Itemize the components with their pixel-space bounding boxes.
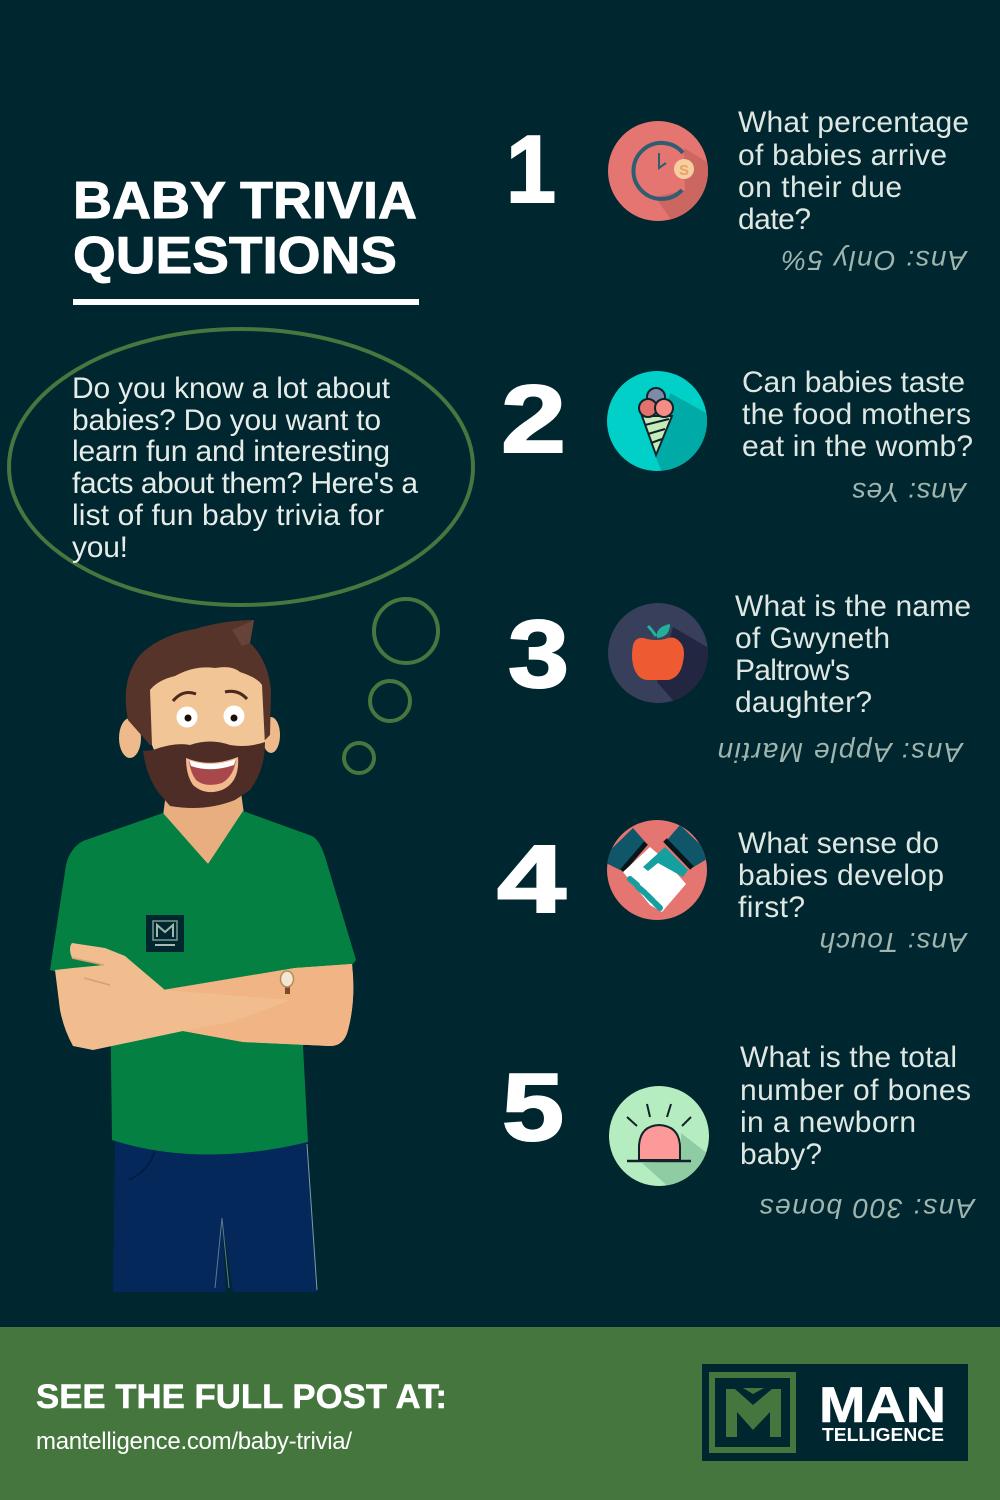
question 1: What percentage: [738, 106, 969, 139]
intro text: learn fun and interesting: [72, 435, 390, 468]
number 4: 4: [497, 826, 566, 933]
character: smiling bearded man: [50, 620, 356, 1292]
question 3: daughter?: [735, 686, 872, 719]
question 2: Can babies taste: [742, 366, 965, 399]
answer 2 upside down: Ans: Yes: [852, 477, 968, 508]
intro text: Do you know a lot about: [72, 372, 391, 405]
icon: handshake: [607, 820, 707, 920]
item 1: [506, 106, 969, 276]
answer 3 upside down: Ans: Apple Martin: [718, 737, 964, 768]
number 2: 2: [501, 366, 566, 473]
logo: TELLIGENCE: [822, 1425, 944, 1445]
icon: apple: [608, 603, 712, 705]
footer band: [0, 1327, 1000, 1500]
logo: [702, 1364, 968, 1461]
answer 4 upside down: Ans: Touch: [820, 927, 968, 958]
question 3: [735, 590, 971, 719]
question 2: the food mothers: [742, 398, 971, 431]
trousers: [113, 1140, 317, 1292]
question 4: What sense do: [738, 827, 939, 860]
thought bubble: [9, 329, 473, 773]
call to action heading: SEE THE FULL POST AT:: [36, 1378, 447, 1416]
question 2: eat in the womb?: [742, 430, 973, 463]
ears: [119, 717, 280, 758]
beard: [143, 742, 265, 808]
question 1: [738, 106, 969, 236]
intro text: you!: [72, 531, 128, 564]
item 5: [502, 1041, 976, 1224]
question 1: on their due: [738, 171, 902, 204]
answer 5 upside down: Ans: 300 bones: [760, 1193, 976, 1224]
question 3: Paltrow's: [735, 654, 850, 687]
icon: clock with coin: S: [679, 162, 689, 179]
item 2: [501, 366, 973, 508]
answer 1 upside down: Ans: Only 5%: [782, 245, 968, 276]
intro text: [72, 372, 418, 564]
question 4: first?: [738, 891, 805, 924]
question 5: What is the total: [740, 1041, 957, 1074]
question 4: [738, 827, 944, 924]
logo: MAN: [819, 1377, 946, 1433]
question 5: baby?: [740, 1138, 822, 1171]
intro text: facts about them? Here's a: [72, 467, 418, 500]
question 5: in a newborn: [740, 1106, 916, 1139]
shirt: [50, 811, 356, 1155]
question 1: of babies arrive: [738, 139, 947, 172]
intro text: list of fun baby trivia for: [72, 499, 384, 532]
badge: [146, 915, 184, 952]
eyes and brows: [173, 691, 247, 728]
number 1: 1: [506, 116, 556, 223]
number 3: 3: [508, 601, 569, 708]
head: [126, 620, 271, 808]
title: [73, 172, 417, 285]
number 5: 5: [502, 1054, 564, 1161]
question 3: of Gwyneth: [735, 622, 890, 655]
icon: clock with coin: [608, 121, 708, 221]
item 3: [508, 590, 971, 768]
question 3: What is the name: [735, 590, 971, 623]
url: mantelligence.com/baby-trivia/: [36, 1428, 352, 1455]
title: QUESTIONS: [73, 227, 397, 285]
title: BABY TRIVIA: [73, 172, 417, 230]
icon: siren: [609, 1086, 712, 1190]
mouth: [186, 757, 238, 792]
question 1: date?: [738, 203, 811, 236]
intro text: babies? Do you want to: [72, 404, 381, 437]
neck: [163, 785, 244, 864]
question 4: babies develop: [738, 859, 944, 892]
question 2: [742, 366, 973, 463]
question 5: number of bones: [740, 1074, 971, 1107]
item 4: [497, 820, 968, 958]
crossed arms: [55, 943, 353, 1050]
icon: ice cream cone: [607, 371, 708, 475]
question 5: [740, 1041, 971, 1171]
watch: [280, 971, 294, 994]
